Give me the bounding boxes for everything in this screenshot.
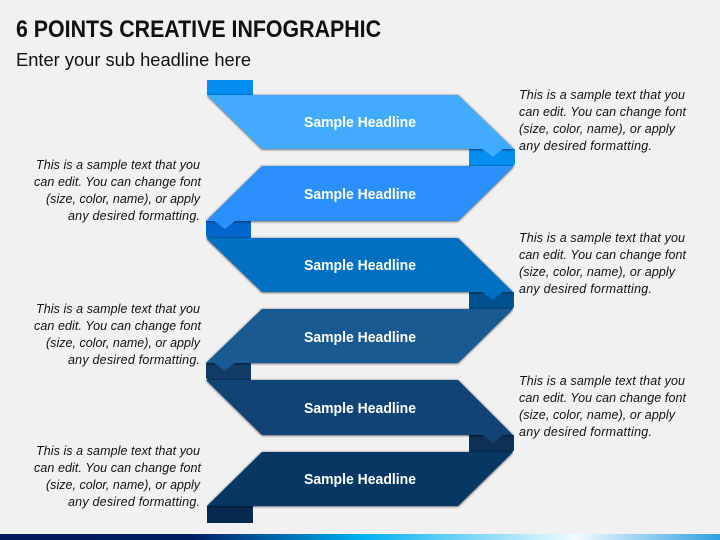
headline 3: Sample Headline	[304, 257, 416, 274]
text block: right 1	[519, 88, 687, 153]
text block: right 1: (size, color, name), or apply	[519, 122, 676, 136]
text block: left 3	[34, 444, 202, 509]
ribbon connector 1	[469, 149, 515, 166]
text block: right 3: any desired formatting.	[519, 425, 652, 439]
text block: right 1: any desired formatting.	[519, 139, 652, 153]
ribbon connector 5	[469, 435, 514, 452]
band 5	[206, 380, 513, 443]
title: 6 POINTS CREATIVE INFOGRAPHIC	[16, 16, 381, 43]
text block: right 3: can edit. You can change font	[519, 391, 687, 405]
fold notch 3	[481, 291, 504, 300]
band 1	[207, 95, 514, 157]
text block: right 1: This is a sample text that you	[519, 88, 685, 102]
band 6	[207, 452, 513, 506]
text block: right 2: any desired formatting.	[519, 282, 652, 296]
text block: left 1: This is a sample text that you	[36, 158, 200, 172]
band 4	[206, 309, 513, 371]
headline 4: Sample Headline	[304, 329, 416, 346]
ribbon connector 2	[206, 221, 251, 238]
band 2	[206, 166, 514, 229]
text block: left 3: (size, color, name), or apply	[46, 478, 201, 492]
fold notch 5	[481, 434, 504, 443]
ribbon tab: bottom	[207, 506, 253, 523]
text block: left 2: any desired formatting.	[68, 353, 200, 367]
fold notch 4	[213, 362, 236, 371]
footer gradient bar	[0, 534, 720, 540]
text block: left 1: any desired formatting.	[68, 209, 200, 223]
band 3	[206, 238, 513, 300]
headline 6: Sample Headline	[304, 471, 416, 488]
text block: left 2: This is a sample text that you	[36, 302, 200, 316]
text block: left 1: (size, color, name), or apply	[46, 192, 201, 206]
text block: left 1	[34, 158, 202, 223]
text block: right 2: (size, color, name), or apply	[519, 265, 676, 279]
text block: right 2	[519, 231, 687, 296]
text block: right 1: can edit. You can change font	[519, 105, 687, 119]
text block: left 3: This is a sample text that you	[36, 444, 200, 458]
subtitle: Enter your sub headline here	[16, 49, 251, 70]
headline 5: Sample Headline	[304, 400, 416, 417]
headline 2: Sample Headline	[304, 186, 416, 203]
text block: right 3: (size, color, name), or apply	[519, 408, 676, 422]
fold notch 2	[213, 220, 236, 229]
ribbon connector 3	[469, 292, 514, 309]
text block: left 2: can edit. You can change font	[34, 319, 202, 333]
fold notch 1	[481, 148, 504, 157]
ribbon tab: top	[207, 80, 253, 95]
text block: right 2: This is a sample text that you	[519, 231, 685, 245]
text block: right 3: This is a sample text that you	[519, 374, 685, 388]
text block: left 2: (size, color, name), or apply	[46, 336, 201, 350]
headline 1: Sample Headline	[304, 114, 416, 131]
text block: left 3: can edit. You can change font	[34, 461, 202, 475]
text block: left 1: can edit. You can change font	[34, 175, 202, 189]
text block: right 2: can edit. You can change font	[519, 248, 687, 262]
ribbon connector 4	[206, 363, 251, 380]
text block: left 3: any desired formatting.	[68, 495, 200, 509]
text block: right 3	[519, 374, 687, 439]
text block: left 2	[34, 302, 202, 367]
